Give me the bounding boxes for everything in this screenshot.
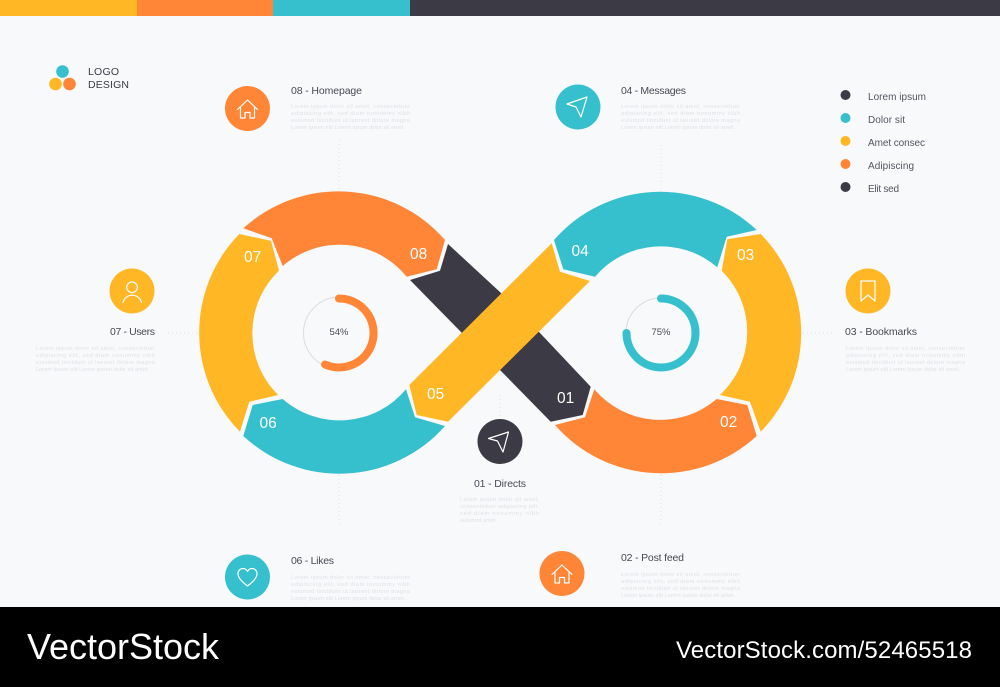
callout 03 bookmarks: Lorem ipsum elit Lorem ipsum dolor sit amet. xyxy=(846,367,960,373)
segment 02 orange arc xyxy=(555,389,757,473)
callout 06 likes: 06 - Likes xyxy=(291,555,334,567)
callout 08 homepage: Lorem ipsum elit Lorem ipsum dolor sit amet. xyxy=(291,125,405,131)
callout 06 likes: Lorem ipsum elit Lorem ipsum dolor sit amet. xyxy=(291,596,405,602)
callout 02 post feed: adipiscing elit, sed diam nonummy nibh xyxy=(621,579,740,585)
callout 04 messages: adipiscing elit, sed diam nonummy nibh xyxy=(621,111,740,117)
callout 03 bookmarks xyxy=(845,268,966,373)
logo xyxy=(49,65,129,91)
watermark footer: VectorStock xyxy=(27,626,220,667)
segment 06 teal arc xyxy=(243,389,445,474)
donut chart 75%: 75% xyxy=(651,327,671,338)
segment 05 yellow band: 05 xyxy=(427,386,444,403)
callout 06 likes xyxy=(225,554,411,602)
legend: Elit sed xyxy=(868,184,899,195)
infinity diagram xyxy=(199,191,801,474)
callout 04 messages: Lorem ipsum elit Lorem ipsum dolor sit amet. xyxy=(621,125,735,131)
callout 02 post feed xyxy=(540,551,741,599)
legend xyxy=(840,90,926,195)
callout 08 homepage xyxy=(225,85,411,131)
legend: Amet consec xyxy=(868,138,925,149)
legend: Adipiscing xyxy=(868,161,914,172)
callout 03 bookmarks: Lorem ipsum dolor sit amet, consectetuer xyxy=(846,346,965,352)
donut chart 54%: 54% xyxy=(329,327,349,338)
segment 07 yellow arc xyxy=(199,234,279,432)
donut chart 75% xyxy=(626,298,696,368)
segment 04 teal arc: 04 xyxy=(572,243,589,260)
watermark footer xyxy=(0,607,1000,687)
callout 08 homepage: euismod tincidunt ut laoreet dolore magna xyxy=(291,118,411,124)
segment 04 teal arc xyxy=(554,192,757,277)
segment 03 yellow arc: 03 xyxy=(737,247,754,264)
logo: DESIGN xyxy=(88,79,129,91)
callout 08 homepage: 08 - Homepage xyxy=(291,85,362,97)
callout 02 post feed: Lorem ipsum dolor sit amet, consectetuer xyxy=(621,572,740,578)
callout 07 users: euismod tincidunt ut laoreet dolore magna xyxy=(36,360,156,366)
callout 04 messages: euismod tincidunt ut laoreet dolore magna xyxy=(621,118,741,124)
callout 06 likes: Lorem ipsum dolor sit amet, consectetuer xyxy=(291,575,410,581)
callout 01 directs: Lorem ipsum dolor sit amet, xyxy=(460,497,539,503)
callout 08 homepage: adipiscing elit, sed diam nonummy nibh xyxy=(291,111,410,117)
legend: Dolor sit xyxy=(868,115,905,126)
callout 07 users: Lorem ipsum elit Lorem ipsum dolor sit amet. xyxy=(36,367,149,373)
segment 02 orange arc: 02 xyxy=(720,414,737,431)
segment 08 orange arc: 08 xyxy=(410,246,427,263)
segment 05 yellow band xyxy=(409,243,590,422)
callout 07 users xyxy=(36,268,156,373)
callout 03 bookmarks: adipiscing elit, sed diam nonummy nibh xyxy=(846,353,965,359)
legend: Lorem ipsum xyxy=(868,92,926,103)
callout 06 likes: adipiscing elit, sed diam nonummy nibh xyxy=(291,582,410,588)
segment 08 orange arc xyxy=(243,191,445,277)
callout 02 post feed: 02 - Post feed xyxy=(621,552,684,564)
segment 03 yellow arc xyxy=(720,234,801,432)
callout 01 directs: sed diam nonummy nibh xyxy=(460,511,539,517)
callout 07 users: adipiscing elit, sed diam nonummy nibh xyxy=(36,353,155,359)
callout 07 users: 07 - Users xyxy=(110,326,155,338)
callout 02 post feed: euismod tincidunt ut laoreet dolore magna xyxy=(621,586,741,592)
callout 07 users: Lorem ipsum dolor sit amet, consectetuer xyxy=(36,346,155,352)
donut chart 54% xyxy=(304,297,376,369)
callout 04 messages: 04 - Messages xyxy=(621,85,686,97)
callout 04 messages xyxy=(556,84,741,131)
segment 06 teal arc: 06 xyxy=(260,415,277,432)
segment 01 dark band xyxy=(410,244,591,422)
callout 01 directs: 01 - Directs xyxy=(474,478,526,490)
callout 03 bookmarks: euismod tincidunt ut laoreet dolore magna xyxy=(846,360,966,366)
watermark footer: VectorStock.com/52465518 xyxy=(676,637,972,664)
callout 01 directs: consectetuer adipiscing elit, xyxy=(460,504,539,510)
callout 06 likes: euismod tincidunt ut laoreet dolore magna xyxy=(291,589,411,595)
segment 01 dark band: 01 xyxy=(557,390,574,407)
top colour bar xyxy=(0,0,1000,16)
callout 04 messages: Lorem ipsum dolor sit amet, consectetuer xyxy=(621,104,740,110)
callout 08 homepage: Lorem ipsum dolor sit amet, consectetuer xyxy=(291,104,410,110)
segment 07 yellow arc: 07 xyxy=(244,249,261,266)
callout 03 bookmarks: 03 - Bookmarks xyxy=(845,326,917,338)
logo: LOGO xyxy=(88,66,119,78)
callout 01 directs: euismod amet. xyxy=(460,518,497,524)
callout 02 post feed: Lorem ipsum elit Lorem ipsum dolor sit amet. xyxy=(621,593,735,599)
callout 01 directs xyxy=(460,419,539,524)
